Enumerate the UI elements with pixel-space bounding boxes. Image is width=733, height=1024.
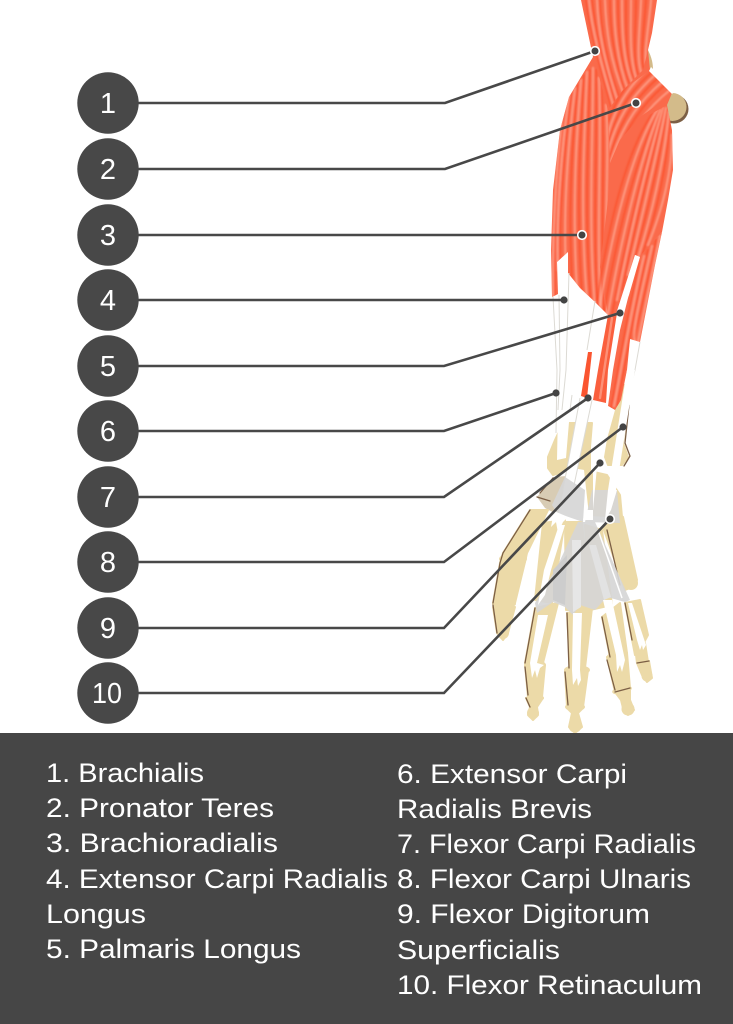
legend left column: 2. Pronator Teres	[46, 793, 274, 823]
number badge 8: 8	[100, 547, 116, 579]
hand tendons	[530, 370, 646, 686]
leader line 6	[130, 389, 560, 431]
white fascia strip at elbow	[649, 67, 675, 94]
carpal bones	[537, 470, 622, 517]
number badge 3: 3	[100, 220, 116, 252]
number badge 2	[77, 138, 139, 200]
number badge 1: 1	[100, 88, 116, 120]
legend right column: Radialis Brevis	[397, 794, 592, 824]
leader line 1	[130, 47, 599, 103]
legend left column	[46, 758, 388, 964]
legend panel	[0, 733, 733, 1024]
muscle backing silhouette	[551, 0, 673, 315]
number badge 9: 9	[100, 613, 116, 645]
leader line 10	[130, 515, 614, 693]
legend right column: 8. Flexor Carpi Ulnaris	[397, 864, 691, 894]
legend right column: 6. Extensor Carpi	[397, 759, 627, 789]
number badge 9	[77, 597, 139, 659]
hand bones	[492, 510, 652, 733]
illustration: forearm and hand anatomy	[492, 0, 688, 733]
number badge 10: 10	[92, 678, 122, 710]
palmar aponeurosis	[535, 522, 630, 615]
flexor muscle group	[597, 108, 672, 315]
leader line 3	[130, 231, 586, 239]
forearm tendons	[553, 273, 640, 490]
flexor carpi ulnaris muscle strip	[608, 232, 662, 410]
number badge 3	[77, 204, 139, 266]
number badge 5	[77, 335, 139, 397]
palmaris longus muscle strip	[593, 313, 617, 403]
flexor retinaculum	[552, 477, 620, 523]
brachioradialis muscle	[553, 68, 607, 315]
pronator teres muscle	[608, 72, 670, 162]
legend right column: 10. Flexor Retinaculum	[397, 970, 702, 1000]
legend left column: 4. Extensor Carpi Radialis	[46, 864, 388, 894]
legend right column: 7. Flexor Carpi Radialis	[397, 829, 696, 859]
white slit between flexors	[616, 255, 640, 318]
flexor carpi radialis muscle strip	[581, 352, 592, 398]
legend right column	[397, 759, 702, 1000]
number badge 7: 7	[100, 482, 116, 514]
number badge 4: 4	[100, 285, 116, 317]
brachialis muscle	[586, 0, 651, 110]
legend right column: Superficialis	[397, 935, 560, 965]
leader line 2	[130, 99, 640, 169]
legend left column: 3. Brachioradialis	[46, 828, 278, 858]
number badge 4	[77, 269, 139, 331]
number badge 7	[77, 466, 139, 528]
number badge 8	[77, 531, 139, 593]
number badge 5: 5	[100, 351, 116, 383]
number badge 2: 2	[100, 154, 116, 186]
number badge 6	[77, 400, 139, 462]
leader line 9	[130, 459, 604, 628]
leader line 5	[130, 309, 624, 366]
leader line 4	[130, 296, 568, 304]
radius and ulna	[548, 385, 630, 475]
number badge 10	[77, 662, 139, 724]
leader line 7	[130, 394, 592, 497]
number badge 1	[77, 72, 139, 134]
legend right column: 9. Flexor Digitorum	[397, 899, 650, 929]
legend left column: 1. Brachialis	[46, 758, 204, 788]
leader line 8	[130, 423, 627, 562]
legend left column: Longus	[46, 899, 146, 929]
legend left column: 5. Palmaris Longus	[46, 934, 301, 964]
number badge 6: 6	[100, 416, 116, 448]
icon: elbow bone	[645, 50, 688, 124]
